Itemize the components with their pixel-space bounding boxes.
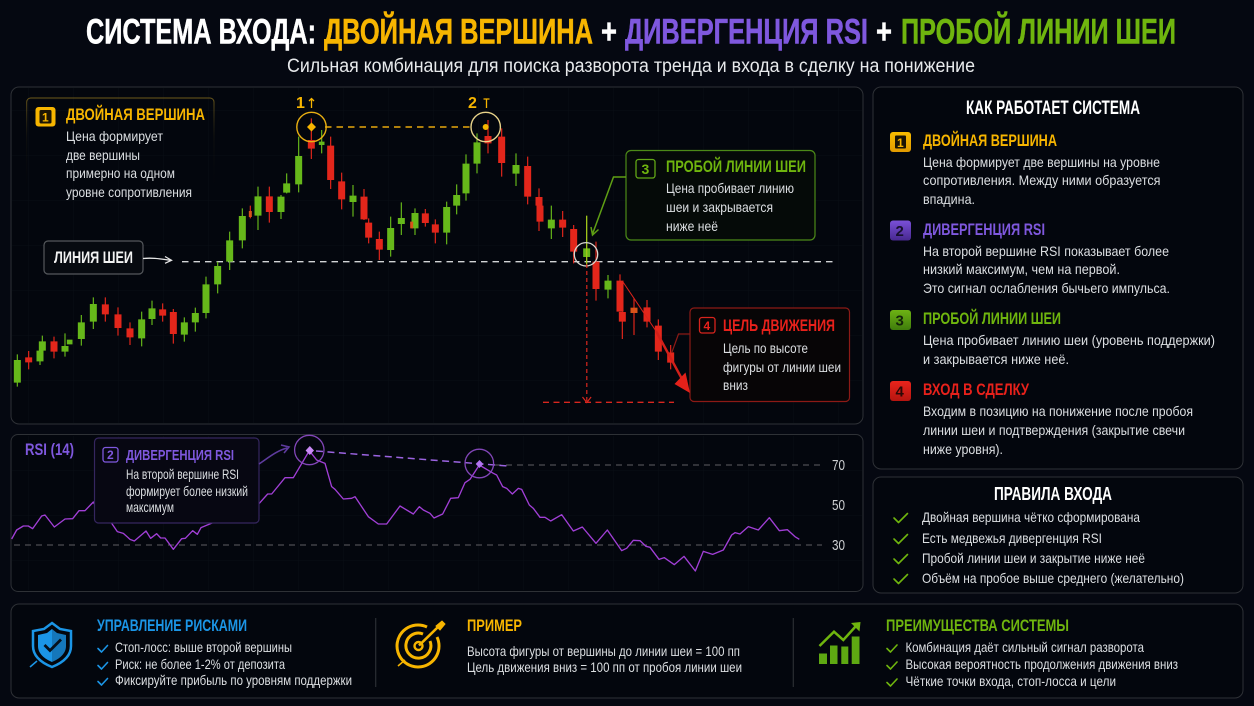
icon: shield <box>30 623 71 667</box>
peak 1 marker <box>296 95 326 142</box>
step 4: Входим в позицию на понижение после пробоя <box>923 403 1193 419</box>
panel: bottom strip <box>11 604 1243 698</box>
callout: neckline breakout <box>626 150 815 240</box>
step 1 <box>890 131 1160 207</box>
peak line: resistance level <box>325 126 472 128</box>
RSI marker 1 <box>295 435 324 465</box>
peak 2 marker: 2 <box>468 95 477 112</box>
section: system advantages: ПРЕИМУЩЕСТВА СИСТЕМЫ <box>886 616 1069 635</box>
section: example: Цель движения вниз = 100 пп от пробоя линии шеи <box>467 659 742 675</box>
callout: RSI divergence: На второй вершине RSI <box>126 466 239 482</box>
section: system advantages: Чёткие точки входа, стоп-лосса и цели <box>906 673 1116 689</box>
panel: how the system works <box>873 87 1243 469</box>
candlesticks: second part <box>447 120 671 369</box>
step 3: 3 <box>896 312 904 330</box>
callout: double top: примерно на одном <box>66 165 175 181</box>
callout: target: вниз <box>723 377 748 393</box>
step 2 <box>890 220 1170 296</box>
callout: neckline breakout: ПРОБОЙ ЛИНИИ ШЕИ <box>666 157 806 176</box>
title: ДИВЕРГЕНЦИЯ RSI <box>625 12 868 52</box>
RSI divergence line <box>316 451 508 466</box>
callout: double top: 1 <box>42 110 49 124</box>
panel: entry rules: Пробой линии шеи и закрытие ниже неё <box>922 550 1145 566</box>
section: risk management: Риск: не более 1-2% от депозита <box>115 656 285 672</box>
title <box>86 12 1176 52</box>
step 2: На второй вершине RSI показывает более <box>923 243 1169 259</box>
neckline label: ЛИНИЯ ШЕИ <box>54 248 133 267</box>
title: СИСТЕМА ВХОДА: <box>86 12 316 52</box>
title: + <box>876 12 892 52</box>
step 2: Это сигнал ослабления бычьего импульса. <box>923 280 1170 296</box>
callout: double top: две вершины <box>66 147 140 163</box>
callout: RSI divergence: 2 <box>107 448 114 462</box>
breakout circle <box>574 243 598 266</box>
step 4: ВХОД В СДЕЛКУ <box>923 380 1029 399</box>
callout: neckline breakout: 3 <box>642 161 650 177</box>
step 1: ДВОЙНАЯ ВЕРШИНА <box>923 131 1057 150</box>
panel: entry rules: ПРАВИЛА ВХОДА <box>994 484 1112 504</box>
panel: entry rules: Двойная вершина чётко сформирована <box>922 509 1140 525</box>
RSI axis labels: 30 <box>832 538 845 554</box>
icon: target <box>397 621 445 667</box>
step 1: 1 <box>897 136 904 150</box>
RSI marker 2 <box>465 449 494 478</box>
section: system advantages: Высокая вероятность продолжения движения вниз <box>906 656 1178 672</box>
step 1: впадина. <box>923 191 975 207</box>
callout: target: Цель по высоте <box>723 340 808 356</box>
title: ДВОЙНАЯ ВЕРШИНА <box>324 12 593 52</box>
callout: RSI divergence: максимум <box>126 499 174 515</box>
callout: target: ЦЕЛЬ ДВИЖЕНИЯ <box>723 316 835 335</box>
arrow: RSI divergence <box>259 445 289 464</box>
RSI line <box>12 451 799 571</box>
section: system advantages: Комбинация даёт сильный сигнал разворота <box>906 639 1144 655</box>
step 3: и закрывается ниже неё. <box>923 351 1069 367</box>
RSI levels <box>14 465 822 545</box>
peak 1 marker: 1 <box>296 95 305 112</box>
callout: RSI divergence: ДИВЕРГЕНЦИЯ RSI <box>126 447 234 464</box>
callout: double top: ДВОЙНАЯ ВЕРШИНА <box>66 105 205 124</box>
panel: entry rules <box>873 477 1243 593</box>
panel: entry rules: Объём на пробое выше среднего (желательно) <box>922 570 1184 586</box>
callout: double top: уровне сопротивления <box>66 184 192 200</box>
callout: target: 4 <box>704 319 710 333</box>
step 2: ДИВЕРГЕНЦИЯ RSI <box>923 220 1045 239</box>
title: + <box>601 12 617 52</box>
callout: neckline breakout: Цена пробивает линию <box>666 180 794 196</box>
RSI axis labels: 70 <box>832 458 845 474</box>
arrow: downward move <box>623 282 690 393</box>
callout: neckline breakout: ниже неё <box>666 218 718 234</box>
section: system advantages <box>886 616 1178 689</box>
step 2: 2 <box>896 223 904 240</box>
step 4: ниже уровня). <box>923 441 1003 457</box>
callout: target <box>690 308 850 402</box>
section: risk management: Стоп-лосс: выше второй вершины <box>115 639 292 655</box>
callout: target: фигуры от линии шеи <box>723 359 841 375</box>
section: risk management: УПРАВЛЕНИЕ РИСКАМИ <box>97 616 247 635</box>
peak 2 marker <box>468 95 500 142</box>
subtitle: Сильная комбинация для поиска разворота тренда и входа в сделку на понижение <box>287 56 975 77</box>
arrow: breakout <box>591 177 626 235</box>
connector: target <box>672 334 690 352</box>
step 4: линии шеи и подтверждения (закрытие свечи <box>923 422 1185 438</box>
neckline label <box>44 241 172 274</box>
callout: double top <box>27 98 214 200</box>
callout: neckline breakout: шеи и закрывается <box>666 199 773 215</box>
neckline <box>182 261 837 263</box>
step 3: ПРОБОЙ ЛИНИИ ШЕИ <box>923 309 1061 328</box>
step 4 <box>890 380 1193 457</box>
RSI axis labels <box>832 458 845 554</box>
section: risk management: Фиксируйте прибыль по уровням поддержки <box>115 672 352 688</box>
icon: growth chart <box>819 622 860 664</box>
step 1: сопротивления. Между ними образуется <box>923 172 1160 188</box>
step 4: 4 <box>896 384 904 400</box>
heading: КАК РАБОТАЕТ СИСТЕМА <box>966 98 1140 119</box>
candlesticks: first part <box>17 118 435 387</box>
panel: price chart <box>11 87 863 424</box>
step 3: Цена пробивает линию шеи (уровень поддержки) <box>923 332 1215 348</box>
section: example: ПРИМЕР <box>467 616 522 635</box>
callout: RSI divergence <box>94 438 259 523</box>
callout: double top: Цена формирует <box>66 128 164 144</box>
section: risk management <box>97 616 352 688</box>
panel: RSI chart <box>11 434 863 592</box>
section: example <box>467 616 742 675</box>
callout: RSI divergence: формирует более низкий <box>126 483 248 499</box>
RSI label: RSI (14) <box>25 440 74 459</box>
RSI axis labels: 50 <box>832 498 845 514</box>
step 1: Цена формирует две вершины на уровне <box>923 154 1160 170</box>
step 2: низкий максимум, чем на первой. <box>923 261 1120 277</box>
section: example: Высота фигуры от вершины до линии шеи = 100 пп <box>467 643 740 659</box>
target height line <box>543 264 674 402</box>
rule checks <box>894 514 908 584</box>
step 3 <box>890 309 1215 367</box>
panel: entry rules: Есть медвежья дивергенция RSI <box>922 530 1102 546</box>
